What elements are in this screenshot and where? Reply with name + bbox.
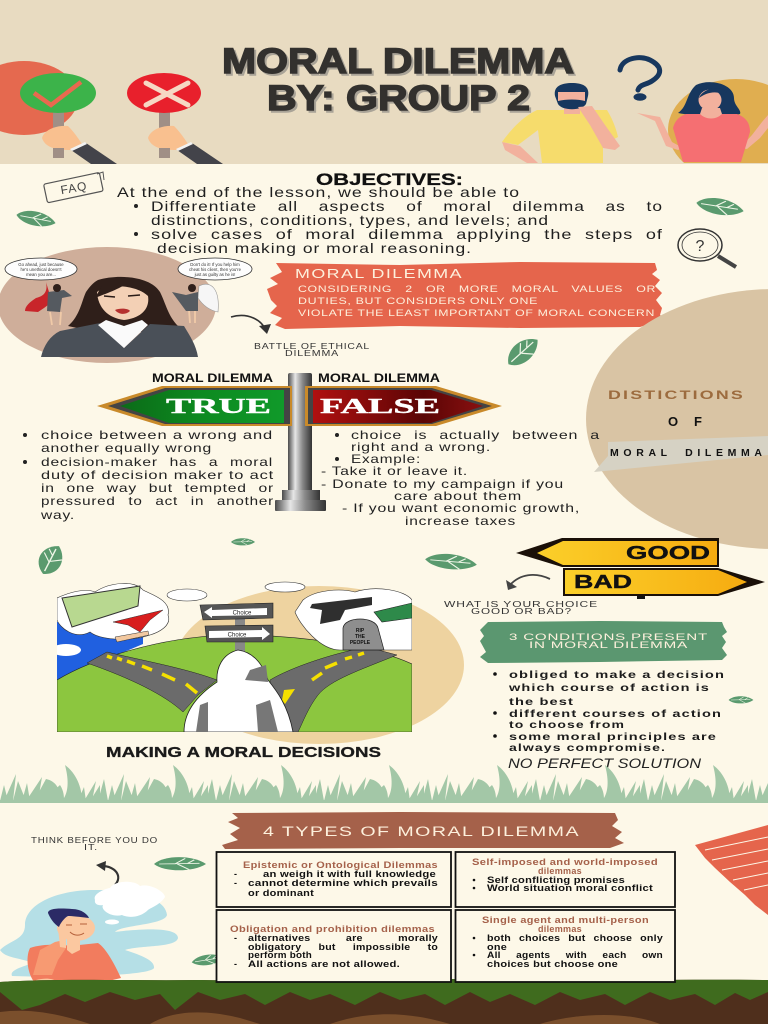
text: moral dilemma false list: Example: [351,452,421,466]
caption: what is your choice: GOOD OR BAD? [471,607,572,616]
hair [48,908,89,927]
text: moral dilemma false list: - If you want economic growth, [342,501,580,515]
text: conditions list: which course of action is [508,682,710,694]
icon: magnifying glass [678,229,736,267]
of label: O F [668,414,702,429]
speech bubble left [5,258,77,280]
speech bubble left: Go ahead, just because [18,262,64,267]
diploma [115,631,149,642]
blue blob [0,890,178,977]
objective list: decision making or moral reasoning. [157,240,472,256]
box: single agent and multi-person dilemmas: one [487,942,507,952]
arrow to choice caption [506,575,550,590]
text: moral dilemma true list: in one way but tempted or [41,481,274,495]
box: self-imposed and world-imposed dilemmas: dilemmas [538,866,582,876]
small cloud [167,589,207,601]
text: moral dilemma false list: choice is actually between a [351,428,600,442]
bad sign [563,568,765,599]
sky [57,622,143,680]
sweater [28,943,121,983]
icon: thinking man [502,83,620,163]
objectives text block [117,170,663,256]
box: epistemic or ontological dilemmas: cannot determine which prevails [248,878,438,888]
illustration: thinking person [0,882,178,984]
text: moral dilemma true list [23,428,274,522]
woman hair [68,277,178,332]
gun [310,597,372,624]
caption: battle of ethical dilemma [254,342,370,358]
tan circle behind road illustration [174,586,464,744]
panel: three conditions heading [480,621,727,663]
face smile [66,924,87,935]
small cloud left [57,644,81,656]
leaf [154,857,206,870]
objective list: solve cases of moral dilemma applying the steps of [151,226,663,242]
panel: moral dilemma definition [267,262,664,329]
leaf [15,208,57,230]
caption: think before you do it: THINK BEFORE YOU DO [31,836,158,845]
ground [0,979,768,1024]
leaf [424,552,478,572]
hand on cheek [58,928,66,948]
text: conditions list: different courses of action [509,708,722,720]
box: epistemic or ontological dilemmas: - [234,869,237,879]
text: moral dilemma true list: way. [40,508,75,522]
box: single agent and multi-person dilemmas: Single agent and multi-person [482,915,649,925]
panel body: DUTIES, BUT CONSIDERS ONLY ONE [298,296,538,307]
box: self-imposed and world-imposed dilemmas: Self-imposed and world-imposed [472,857,658,867]
text: moral dilemma true list: choice between a wrong and [41,428,273,442]
speech bubble left: he's unethical doesn't [20,267,62,272]
box: obligation and prohibition dilemmas: All actions are not allowed. [248,959,400,969]
box: self-imposed and world-imposed dilemmas: Self conflicting promises [487,875,625,885]
good sign: GOOD [626,543,710,563]
box: single agent and multi-person dilemmas: both choices but choose only [487,933,663,943]
text: conditions list: to choose from [509,719,625,731]
box: single agent and multi-person dilemmas: dilemmas [538,924,582,934]
panel body [298,284,656,319]
panel body: CONSIDERING 2 OR MORE MORAL VALUES OR [298,284,656,295]
distinctions heading: DISTICTIONS [608,388,745,402]
box: epistemic or ontological dilemmas [216,852,451,907]
text: moral dilemma false list: - Donate to my campaign if you [321,477,564,491]
money [374,603,412,622]
box: epistemic or ontological dilemmas: or dominant [248,888,314,898]
objective list: distinctions, conditions, types, and levels; and [151,212,549,228]
box: self-imposed and world-imposed dilemmas: World situation moral conflict [487,883,653,893]
icon: shrugging woman [637,82,768,162]
false label: FALSE [320,394,440,418]
box: obligation and prohibition dilemmas: - [234,933,237,943]
leaf [33,540,68,579]
objective list: Differentiate all aspects of moral dilemma as to [151,198,663,214]
text: moral dilemma false list: - Take it or leave it. [321,464,468,478]
panel: distinctions circle [586,289,768,549]
sign one: Choice [233,610,252,616]
hooded figure [184,650,293,732]
text: conditions list: obliged to make a decision [509,669,725,681]
left heading: MORAL DILEMMA [152,371,273,385]
icon: FAQ note: FAQ [59,179,89,197]
title: BY: GROUP 2 [267,79,530,118]
woman face [97,286,148,320]
text: conditions list: some moral principles are [509,731,717,743]
left thought cloud [57,583,169,639]
hood shading [196,665,278,732]
hand on table [36,979,58,984]
box: epistemic or ontological dilemmas: Epistemic or Ontological Dilemmas [243,860,438,870]
title [222,42,574,118]
panel body: VIOLATE THE LEAST IMPORTANT OF MORAL CONCERN [298,308,655,319]
text: moral dilemma true list: another equally wrong [41,441,212,455]
header band [0,0,768,181]
angel figure [172,284,218,323]
signpost: good and bad [516,538,765,599]
head [57,915,95,941]
left road [87,652,217,712]
objectives intro: At the end of the lesson, we should be able to [117,184,520,200]
box: single agent and multi-person dilemmas: All agents with each own [487,950,663,960]
good sign [516,538,719,567]
caption: think before you do it [31,836,158,852]
panel heading: MORAL DILEMMA [295,267,463,281]
text: conditions list: the best [509,696,574,708]
speech bubble left: mean you are... [26,272,56,277]
speech bubble right [178,258,252,280]
left arrow sign [97,386,292,426]
leaf [729,696,753,703]
right road [270,647,397,732]
panel: three conditions heading: 3 CONDITIONS PRESENT [509,632,708,643]
small cloud top [265,582,305,592]
panel: three conditions heading: IN MORAL DILEMMA [529,640,688,651]
box: epistemic or ontological dilemmas: - [234,878,237,888]
illustration: crossroads decision: PEOPLE [350,640,371,646]
icon: question mark [620,58,660,101]
illustration: crossroads decision [51,582,412,732]
signpost: true and false [97,371,502,511]
title: MORAL DILEMMA [222,42,574,81]
leaf [191,952,225,967]
bad sign: BAD [574,572,632,592]
box: obligation and prohibition dilemmas [216,910,451,982]
caption: battle of ethical dilemma: BATTLE OF ETHICAL [254,342,370,351]
box: single agent and multi-person dilemmas: choices but choose one [487,959,618,969]
objective list [134,198,663,256]
caption: what is your choice [444,600,598,616]
sign post [235,619,245,652]
icon: FAQ note [44,172,104,203]
icon: red cross sign [127,73,223,164]
road dashes [107,653,364,693]
text: conditions list: always compromise. [509,742,666,754]
text: moral dilemma false list [321,428,600,528]
box: obligation and prohibition dilemmas: obligatory but impossible to [248,942,438,952]
caption: what is your choice: WHAT IS YOUR CHOICE [444,600,598,609]
right thought cloud [295,589,412,650]
objectives heading: OBJECTIVES: [316,170,463,189]
sign one [200,603,273,620]
box: obligation and prohibition dilemmas: Obligation and prohibition dilemmas [230,924,435,934]
leaf [695,195,745,219]
caption: think before you do it: IT. [84,843,98,852]
illustration: crossroads decision: RIP [356,628,365,634]
arrow to battle caption [231,315,271,334]
thought cloud [95,882,165,917]
text: moral dilemma true list: decision-maker has a moral [41,455,273,469]
panel: four types heading: 4 TYPES OF MORAL DILEMMA [263,824,580,839]
box: obligation and prohibition dilemmas: - [234,959,237,969]
leaf [502,332,544,371]
speech bubble right: Don't do it! If you help him [190,262,240,267]
hill [57,635,412,732]
text: no perfect solution: NO PERFECT SOLUTION [508,756,701,771]
text: moral dilemma false list: right and a wrong. [351,440,491,454]
text: moral dilemma true list: pressured to act in another [41,494,274,508]
icon: magnifying glass: ? [696,238,705,255]
forearm [33,940,66,975]
speech bubble right: just as guilty as he is! [194,272,235,277]
text: conditions list [493,669,725,754]
caption: battle of ethical dilemma: DILEMMA [285,349,339,358]
text: moral dilemma false list: care about them [394,489,522,503]
box: obligation and prohibition dilemmas: perform both [248,950,312,960]
moral dilemma label: MORAL DILEMMA [610,447,762,459]
decorative fan: red striped shape [695,825,768,915]
heading: making a moral decisions: MAKING A MORAL DECISIONS [106,744,381,761]
leaf [231,538,255,545]
speech bubble right: cheat his client, then you're [189,267,242,272]
neck [67,936,80,954]
cheque [62,586,140,627]
devil figure [25,282,72,325]
box: single agent and multi-person dilemmas [456,910,675,982]
post [275,373,326,511]
sign two: Choice [228,632,247,638]
text: moral dilemma false list: increase taxes [405,514,516,528]
icon: green check sign [20,73,117,164]
illustration: woman torn between devil and angel [0,247,252,363]
right arrow sign [305,386,502,426]
sign two [205,625,273,642]
woman jacket [41,323,198,357]
right heading: MORAL DILEMMA [318,371,440,385]
arrow to think caption [96,861,118,885]
box: self-imposed and world-imposed dilemmas [456,852,675,907]
box: obligation and prohibition dilemmas: alternatives are morally [248,933,438,943]
true label: TRUE [166,394,271,418]
tombstone [343,619,384,650]
box: epistemic or ontological dilemmas: an weigh it with full knowledge [263,869,436,879]
decorative grass band [0,765,768,803]
graduation cap [113,610,163,632]
text: moral dilemma true list: duty of decision maker to act [41,468,274,482]
illustration: crossroads decision: THE [355,634,366,640]
panel: four types heading [222,812,624,849]
